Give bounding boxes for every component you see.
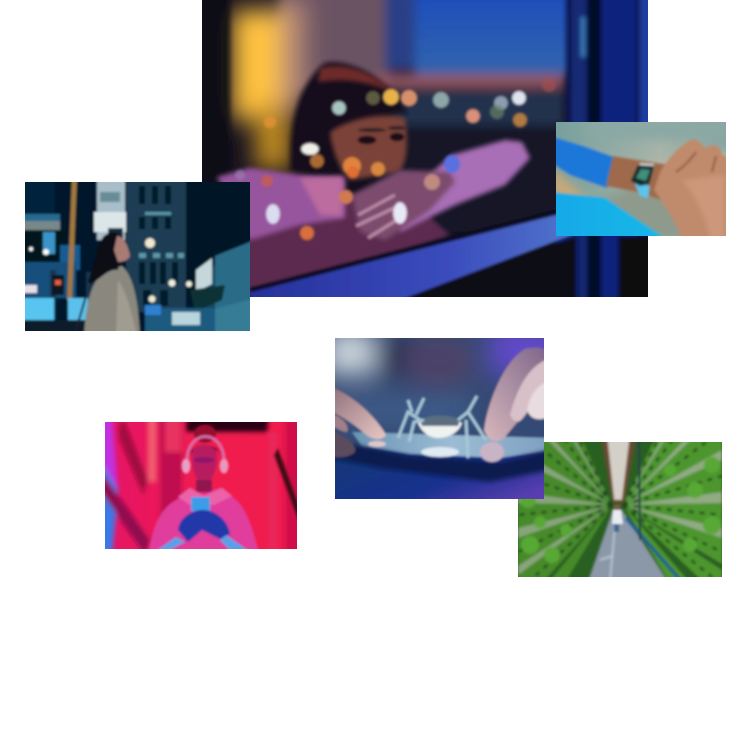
tablet bottom [320,448,560,508]
office building [126,175,186,312]
tablet dark edge [330,445,550,482]
bokeh lights [235,78,556,240]
girl: face [330,116,407,180]
girl: hands [352,170,455,240]
hand [654,139,732,240]
city lights [145,238,192,302]
right lettuce wall [623,300,722,670]
woman: face and neck [192,445,217,485]
blue irrigation rail [626,518,682,582]
girl: torso [245,190,450,296]
woman: phone [191,497,210,511]
warm lamp glow [232,0,306,170]
bright blue street glow [20,298,88,336]
photo: wrist with smartwatch [556,122,726,236]
lettuce clumps in foreground [520,457,721,563]
photo: woman looking up at city at night [25,182,250,331]
clock tower [94,180,126,260]
girl: hair [290,62,408,172]
woman: coat [84,266,140,336]
girl: left arm sleeve [217,168,345,240]
person in white coat [612,505,623,532]
girl: right arm sleeve [395,140,530,232]
smartwatch [631,163,654,198]
woman: headphones [182,436,228,473]
window sill [250,212,580,300]
support pole [639,436,640,540]
forearm [606,156,670,202]
floor aisle [588,510,668,582]
photo: woman with headphones and phone in red light [105,422,297,549]
photo: fingers touching tablet with robotic crab [335,338,544,499]
woman: hands [178,510,230,542]
right fingers [484,348,550,441]
ceiling [601,436,636,503]
left fingers [328,386,386,457]
window frame [556,0,656,310]
woman: face [114,236,130,262]
photo: girl looking through window at night [202,0,648,297]
woman: cuffs [155,535,250,552]
girl: eyes [358,126,406,144]
blue sleeve [550,136,617,188]
tablet screen [352,432,550,458]
left lettuce wall [518,300,612,660]
woman: bag strap [76,296,86,330]
orange lamp post [67,178,77,300]
turquoise railing [550,192,668,240]
right low building [145,238,255,336]
woman: hair bun [194,425,216,443]
woman: hoodie [148,488,259,555]
photo: vertical farm lettuce corridor [518,442,722,577]
woman: hair [88,232,122,284]
robotic crab [398,396,486,458]
left street signs [20,178,114,325]
reflection on tablet [368,441,504,462]
